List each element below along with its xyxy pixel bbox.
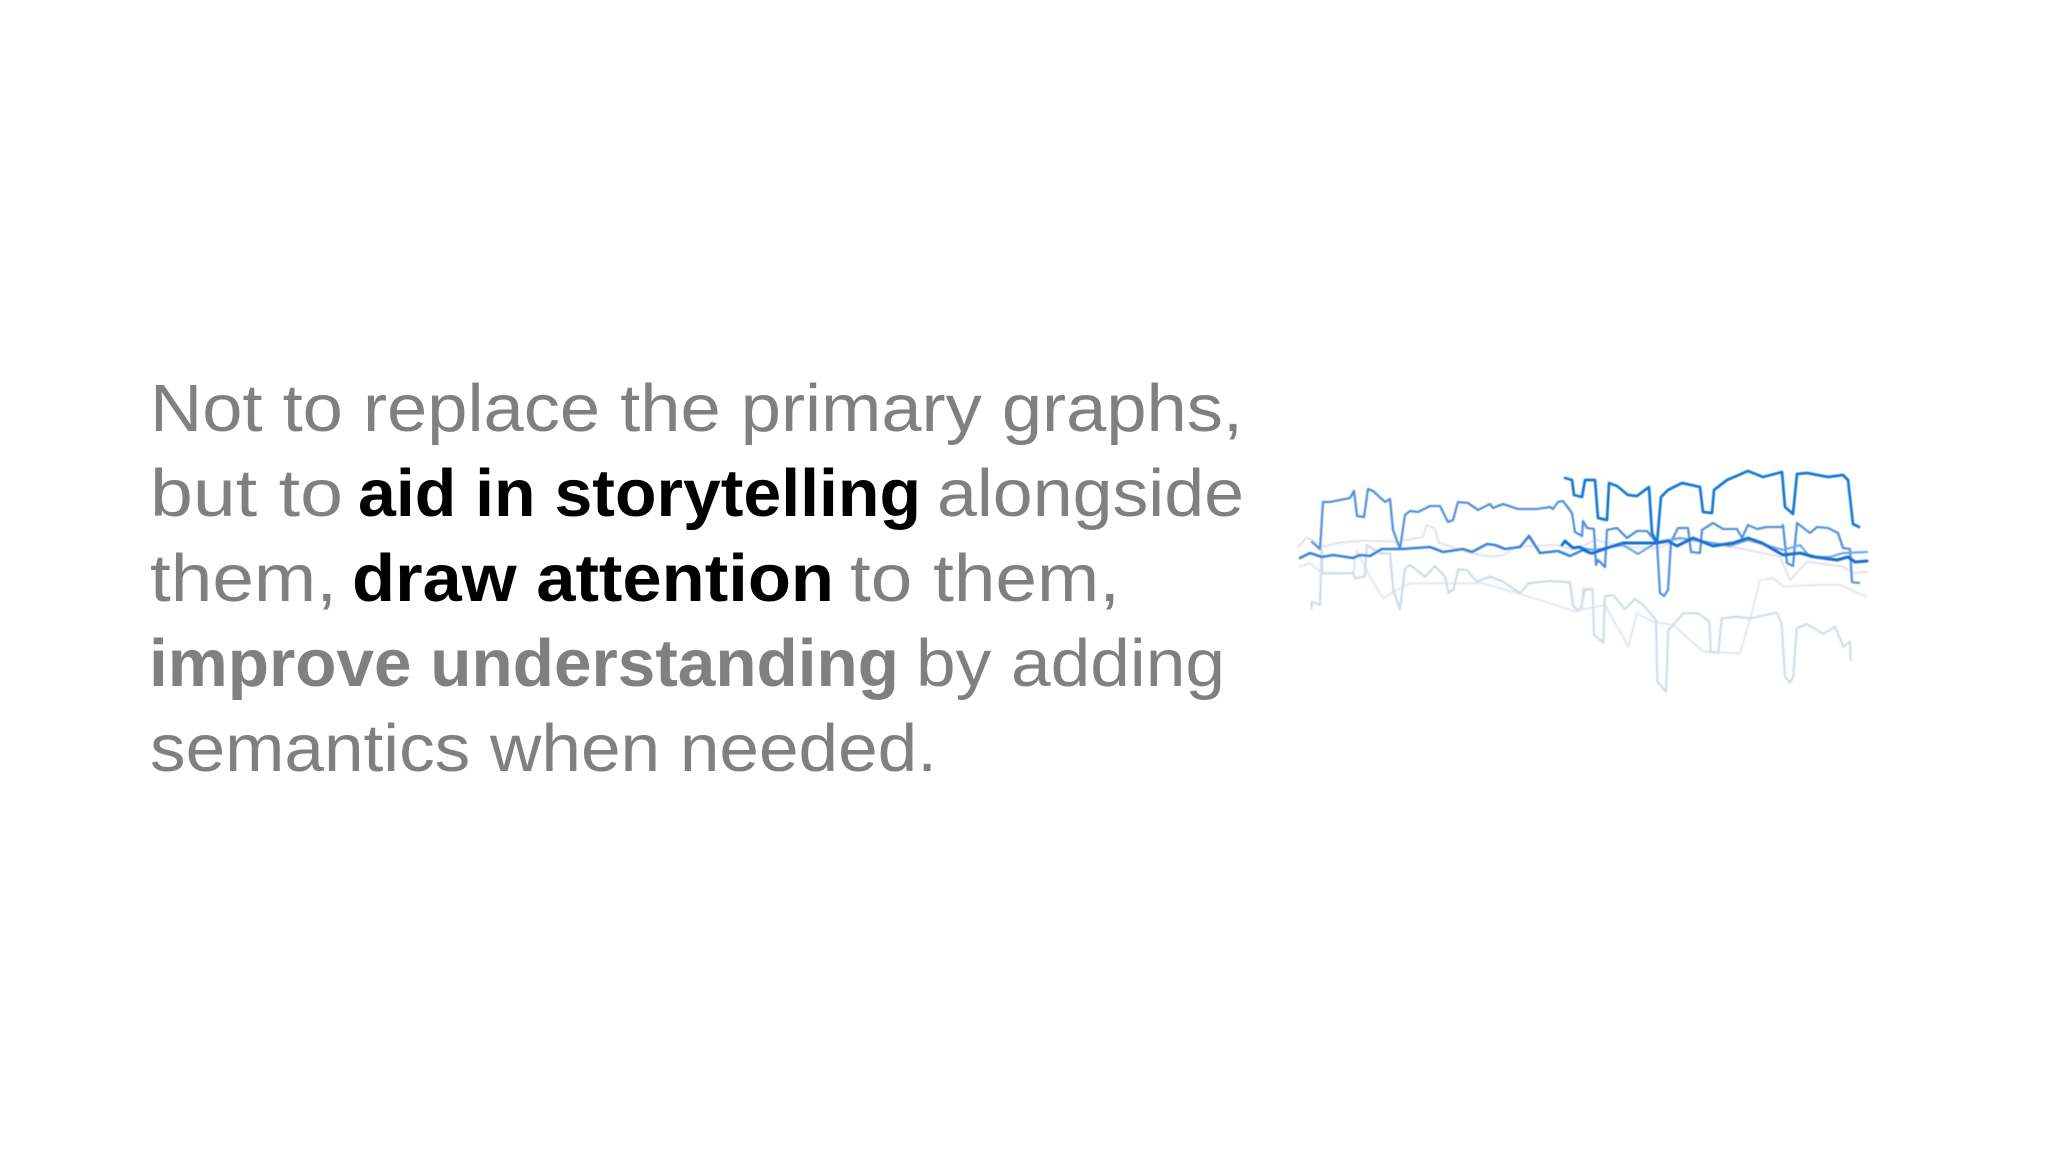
text line 3 with emphasis on draw attention: them, [150,541,337,616]
text line 3 with emphasis on draw attention: draw attention [352,541,834,616]
faint ghost lines, left half [1298,525,1590,612]
text line 3 with emphasis on draw attention [150,541,1120,616]
line chart illustration with fading ghost lines [1298,471,1867,692]
text line 2 with emphasis on aid in storytelling: but to [150,456,343,531]
text line 4 with emphasis on improve understanding [149,626,1225,701]
light blue middle series [1580,538,1867,557]
text line 4 with emphasis on improve understanding: by adding [916,626,1225,701]
dark blue top series [1565,471,1859,543]
dark blue trend series [1562,538,1867,562]
text line 2 with emphasis on aid in storytelling [150,456,1244,531]
text line 2 with emphasis on aid in storytelling: aid in storytelling [358,456,921,531]
medium blue series with dips [1312,489,1859,596]
text line 4 with emphasis on improve understanding: improve understanding [149,626,899,701]
text line 1: Not to replace the primary graphs, [150,371,1243,446]
text line 3 with emphasis on draw attention: to them, [850,541,1120,616]
main blue trend series [1300,536,1590,558]
text block: main statement [149,371,1244,786]
text line 5: semantics when needed. [150,711,937,786]
faint ghost lines, right half [1580,539,1867,692]
text line 2 with emphasis on aid in storytelling: alongside [937,456,1244,531]
